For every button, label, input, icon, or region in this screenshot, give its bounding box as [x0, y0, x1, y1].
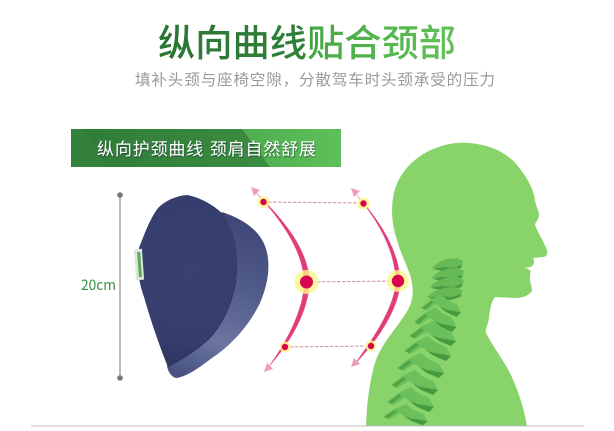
- subtitle: 填补头颈与座椅空隙，分散驾车时头颈承受的压力: [135, 71, 495, 89]
- dimension ruler: [81, 192, 123, 381]
- pillow tag: [134, 249, 144, 280]
- title: 纵向曲线贴合颈部: [158, 22, 456, 64]
- left points: [258, 196, 270, 208]
- right pink curve: [351, 188, 409, 367]
- pillow: [134, 195, 268, 378]
- left pink curve: [251, 187, 398, 372]
- pillow back: [167, 212, 268, 378]
- bottom rule: [31, 426, 584, 427]
- banner: [71, 129, 341, 167]
- head silhouette: [366, 143, 547, 426]
- dimension label: 20cm: [81, 274, 116, 295]
- cervical spine: [383, 258, 464, 425]
- arrowheads: [351, 188, 360, 197]
- right points: [358, 198, 370, 210]
- banner text: 纵向护颈曲线 颈肩自然舒展: [97, 140, 316, 159]
- pillow front face: [138, 195, 237, 367]
- arrowheads: [251, 187, 260, 196]
